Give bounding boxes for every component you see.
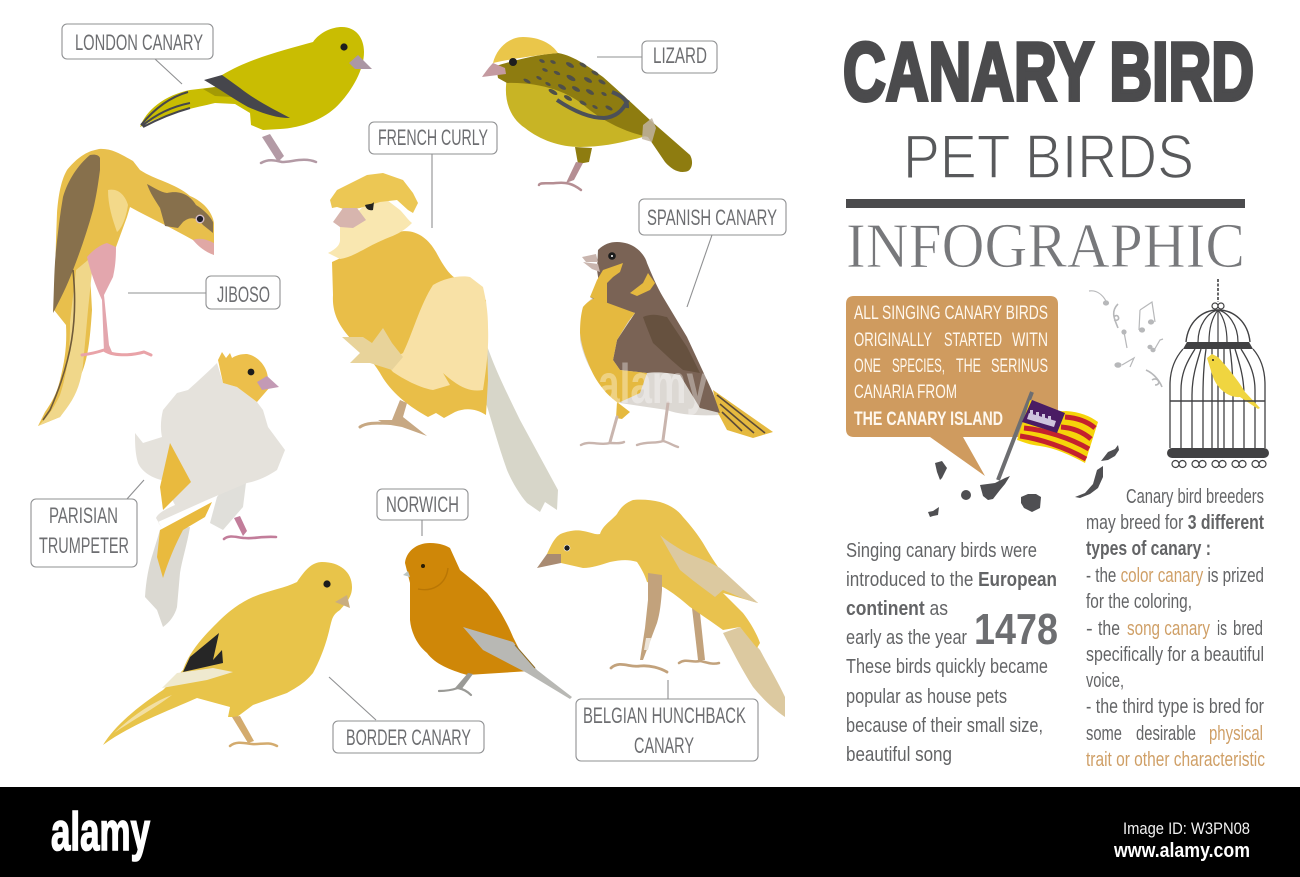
label: Border canary <box>329 677 484 753</box>
text block: canary types: is <box>1217 618 1227 640</box>
icon: flag <box>998 392 1098 480</box>
label: Lizard <box>597 41 717 73</box>
text block: European introduction: introduced to the European <box>846 569 1057 591</box>
label: Spanish canary <box>639 199 786 307</box>
bird: Jiboso <box>38 149 214 426</box>
bird: French curly <box>328 173 558 512</box>
label: Border canary: BORDER CANARY <box>346 725 471 750</box>
label: Norwich: NORWICH <box>386 492 459 517</box>
callout: STARTED <box>944 330 1002 351</box>
text block: canary types: for the coloring, <box>1086 591 1192 613</box>
label: Parisian trumpeter <box>31 480 144 567</box>
text block: canary types: desirable <box>1136 723 1196 745</box>
text block: European introduction: 1478 <box>974 605 1058 654</box>
watermark: alamy <box>598 352 708 415</box>
label: Jiboso <box>128 276 280 309</box>
text block: canary types: some <box>1086 723 1122 745</box>
label: Jiboso: JIBOSO <box>217 282 270 307</box>
label: London canary <box>62 24 213 84</box>
footer: stock photo bar <box>0 787 1300 877</box>
callout: SPECIES, <box>892 356 945 377</box>
text block: European introduction: early as the year <box>846 627 967 649</box>
heading: infographic: INFOGRAPHIC <box>846 210 1245 281</box>
text block: European introduction: These birds quickly became <box>846 656 1048 678</box>
map: Canary Islands <box>928 445 1119 517</box>
label: French curly <box>369 122 497 228</box>
icon: birdcage with canary <box>1167 279 1269 468</box>
text block: canary types: physical <box>1209 723 1263 745</box>
label: Lizard: LIZARD <box>653 43 707 68</box>
footer logo: alamy <box>51 802 150 862</box>
text block: canary types: may breed for 3 different <box>1086 512 1264 534</box>
icon: caged canary <box>1207 354 1260 409</box>
text block: canary types <box>1086 486 1265 771</box>
bird: Lizard <box>482 37 692 190</box>
callout: SERINUS <box>991 356 1048 377</box>
text block: European introduction: beautiful song <box>846 744 952 766</box>
bird: Border canary <box>103 562 352 746</box>
text block: canary types: the <box>1098 618 1120 640</box>
bird: Spanish canary <box>580 242 773 447</box>
text block: European introduction: because of their small size, <box>846 715 1043 737</box>
callout: ALL SINGING CANARY BIRDS <box>854 303 1048 324</box>
text block: canary types: - <box>1086 618 1093 640</box>
label: Belgian hunchback canary <box>576 680 758 761</box>
footer: stock photo bar: Image ID: W3PN08 <box>1123 819 1250 838</box>
icon: music notes <box>1089 291 1163 387</box>
label: Belgian hunchback canary: CANARY <box>634 733 694 758</box>
bird: Belgian hunchback canary <box>537 500 785 717</box>
bird: Norwich <box>403 543 572 699</box>
label: Parisian trumpeter: TRUMPETER <box>39 533 129 558</box>
bird: London canary <box>140 27 372 163</box>
label: Spanish canary: SPANISH CANARY <box>647 205 777 230</box>
footer: stock photo bar: www.alamy.com <box>1113 840 1250 862</box>
text block: European introduction <box>846 540 1058 766</box>
label: French curly: FRENCH CURLY <box>378 125 488 150</box>
label: Parisian trumpeter: PARISIAN <box>49 503 118 528</box>
title bar <box>846 199 1245 208</box>
callout: ORIGINALLY <box>854 330 932 351</box>
callout: ONE <box>854 356 881 377</box>
text block: European introduction: popular as house pets <box>846 686 1007 708</box>
callout: THE <box>956 356 981 377</box>
text block: canary types: types of canary : <box>1086 538 1211 560</box>
label: London canary: LONDON CANARY <box>75 30 203 55</box>
text block: canary types: song canary <box>1127 618 1210 640</box>
callout <box>846 296 1058 476</box>
text block: European introduction: continent as <box>846 598 948 620</box>
text block: European introduction: Singing canary birds were <box>846 540 1037 562</box>
text block: canary types: - the color canary is prized <box>1086 565 1264 587</box>
callout: WITN <box>1012 330 1048 351</box>
label: Norwich <box>377 489 468 536</box>
bird: Parisian trumpeter <box>135 352 285 627</box>
text block: canary types: bred <box>1233 618 1263 640</box>
label: Belgian hunchback canary: BELGIAN HUNCHBACK <box>583 703 746 728</box>
text block: canary types: voice, <box>1086 670 1124 692</box>
callout: CANARIA FROM <box>854 382 957 403</box>
subtitle: PET BIRDS <box>903 123 1194 192</box>
callout: THE CANARY ISLAND <box>854 409 1003 430</box>
